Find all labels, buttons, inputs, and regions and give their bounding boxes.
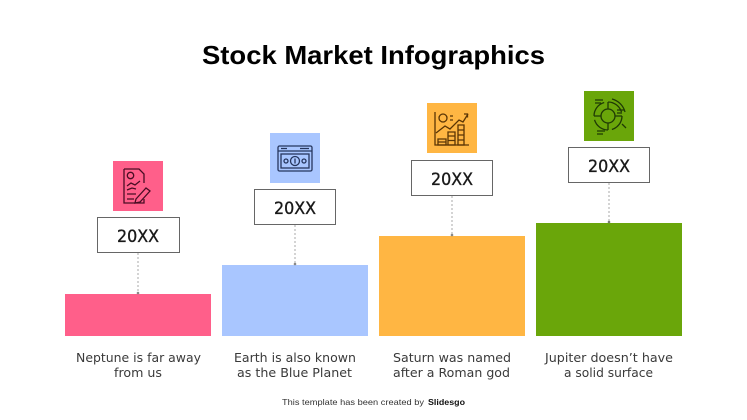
caption: Saturn: after a Roman god <box>393 365 510 380</box>
footer credit: This template has been created by <box>282 397 425 407</box>
caption: Jupiter: a solid surface <box>564 365 653 380</box>
year box: Earth: 20XX <box>274 199 316 218</box>
caption: Saturn: Saturn was named <box>393 350 511 365</box>
connector: Earth <box>294 225 296 265</box>
year box: Earth <box>254 190 336 224</box>
bar: Neptune <box>65 294 211 336</box>
bar: Earth <box>222 265 368 336</box>
column: Jupiter <box>536 91 682 380</box>
caption: Earth: as the Blue Planet <box>237 365 352 380</box>
connector: Saturn <box>451 196 453 236</box>
column: Earth <box>222 133 368 380</box>
year box: Neptune: 20XX <box>117 227 159 246</box>
icon: coin stacks growth chart <box>427 103 477 153</box>
caption: Neptune: from us <box>114 365 162 380</box>
caption: Neptune: Neptune is far away <box>76 350 202 365</box>
bar: Jupiter <box>536 223 682 336</box>
year box: Jupiter: 20XX <box>588 157 630 176</box>
year box: Saturn: 20XX <box>431 170 473 189</box>
year box: Saturn <box>412 160 492 196</box>
year box: Neptune <box>98 218 180 252</box>
column: Neptune <box>65 161 211 380</box>
connector: Jupiter <box>608 183 610 223</box>
title: Stock Market Infographics <box>202 40 545 70</box>
connector: Neptune <box>137 253 139 294</box>
icon: ring chart <box>584 91 634 141</box>
bar: Saturn <box>379 236 525 336</box>
caption: Earth: Earth is also known <box>234 350 356 365</box>
caption: Jupiter: Jupiter doesn’t have <box>544 350 673 365</box>
icon: banknote window <box>270 133 320 183</box>
column: Saturn <box>379 103 525 380</box>
icon: financial document <box>113 161 163 211</box>
footer credit: Slidesgo <box>428 397 465 407</box>
year box: Jupiter <box>568 148 650 182</box>
